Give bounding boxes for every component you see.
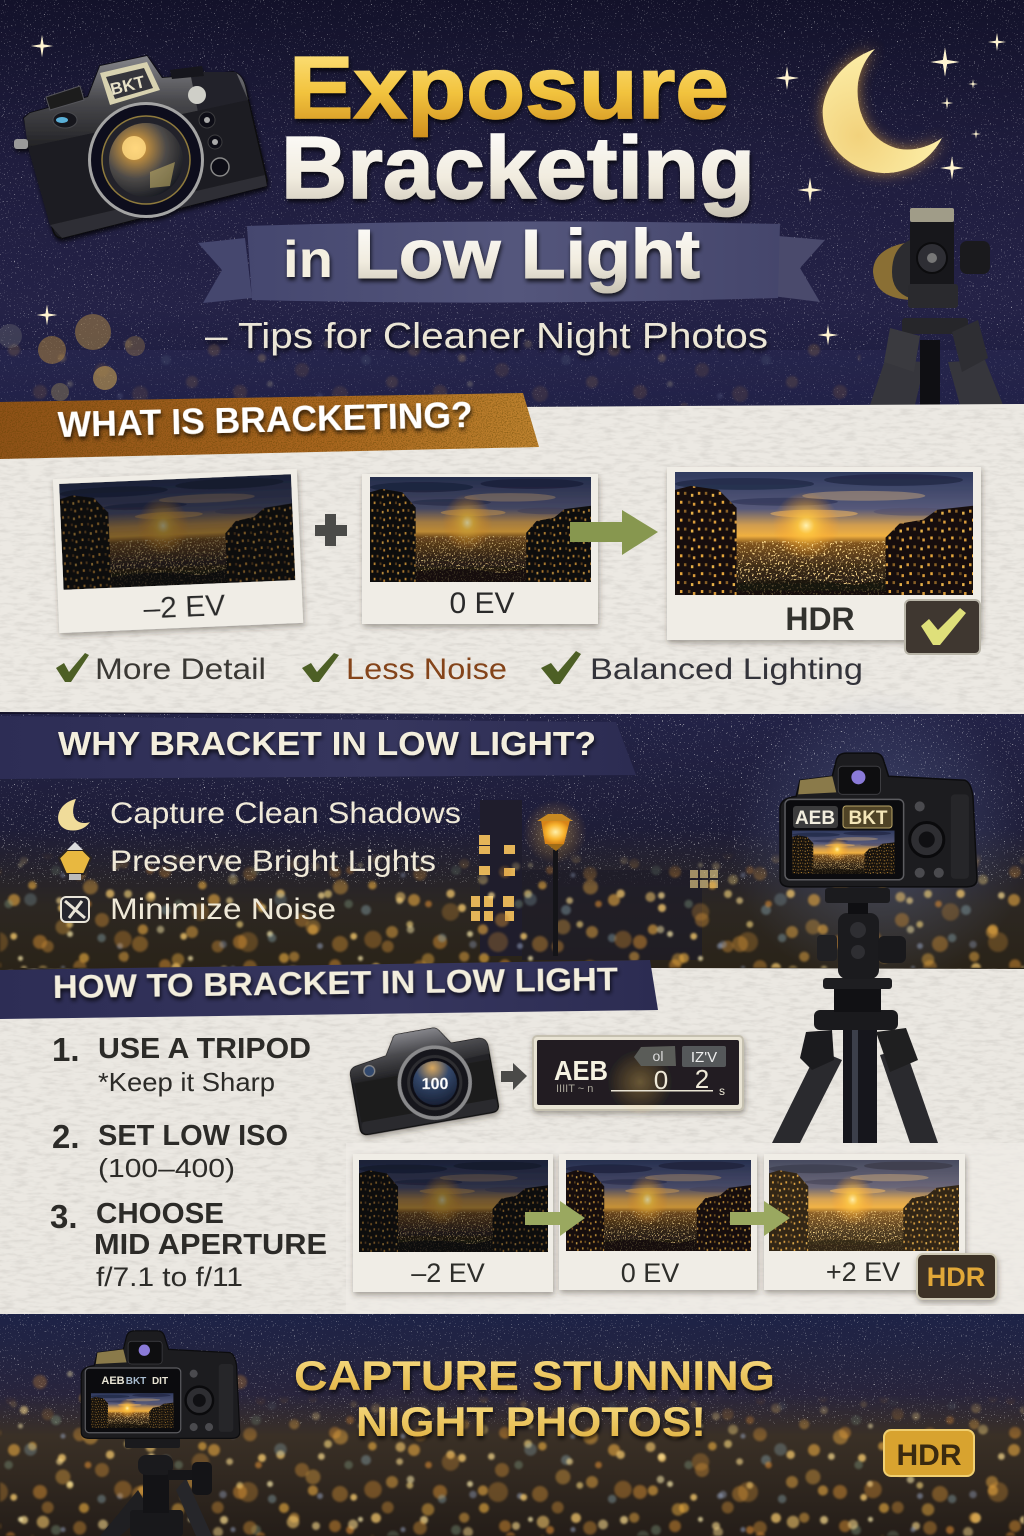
heading: how to bracket	[0, 960, 658, 1019]
step 3: choose mid aperture: f/7.1 to f/11	[96, 1262, 243, 1292]
subtitle: – Tips for Cleaner Night Photos	[205, 315, 768, 356]
step 2: set low iso: (100–400)	[98, 1153, 235, 1183]
title banner: in Low Light: Low Light	[354, 215, 700, 293]
icon: main camera with BKT plate	[14, 56, 267, 238]
icon: tripod with rear camera: AEB	[795, 808, 835, 829]
photo: lower 0 EV: 0 EV	[621, 1258, 679, 1288]
icon: HDR check badge	[905, 600, 980, 654]
icon: tripod with rear camera	[772, 753, 977, 1143]
list item: preserve bright lights	[59, 842, 436, 880]
icon: closing camera on tripod: AEB	[101, 1375, 125, 1387]
list item: minimize noise: Minimize Noise	[110, 893, 336, 926]
icon: closing camera on tripod: BKT	[126, 1376, 146, 1387]
heading: what is bracketing	[0, 390, 540, 460]
icon: sparkle stars	[31, 33, 1006, 346]
panel: why bracket night strip	[0, 712, 1024, 970]
icon: main camera with BKT plate: BKT	[108, 72, 148, 99]
arrow: 0 EV to +2 EV	[730, 1201, 790, 1236]
heading: why bracket in low light	[0, 716, 636, 779]
icon: small camera ISO 100: 100	[422, 1076, 448, 1093]
heading: why bracket in low light: WHY BRACKET IN LOW LIGHT?	[58, 725, 596, 762]
badge: closing HDR: HDR	[896, 1439, 962, 1472]
photo: -2 EV	[53, 469, 303, 633]
title banner: in Low Light: in	[283, 231, 333, 289]
photo: HDR result	[667, 467, 981, 640]
closing headline: NIGHT PHOTOS!	[356, 1398, 706, 1445]
photo: lower +2 EV: +2 EV	[826, 1257, 900, 1287]
photo: lower -2 EV	[353, 1154, 553, 1292]
photo: lower -2 EV: –2 EV	[411, 1258, 485, 1288]
icon: plus sign	[315, 514, 347, 546]
step 2: set low iso	[52, 1118, 288, 1183]
icon: closing camera on tripod	[81, 1331, 240, 1536]
heading: what is bracketing: WHAT IS BRACKETING?	[57, 394, 473, 445]
benefit: balanced lighting: Balanced Lighting	[590, 653, 863, 686]
step 2: set low iso: 2.	[52, 1118, 80, 1155]
icon: closing camera on tripod: DIT	[152, 1376, 168, 1387]
photo: HDR result: HDR	[785, 601, 855, 637]
icon: crescent moon	[823, 49, 942, 173]
title banner: in Low Light	[198, 215, 825, 303]
benefit: balanced lighting	[541, 651, 863, 686]
closing headline	[294, 1352, 775, 1445]
photo: 0 EV: 0 EV	[449, 587, 515, 620]
benefit: less noise: Less Noise	[346, 653, 507, 686]
badge: closing HDR	[884, 1430, 974, 1476]
panel: paper section how to	[0, 968, 1024, 1316]
photo: -2 EV: –2 EV	[143, 589, 226, 625]
panel: AEB display: 0	[654, 1065, 668, 1095]
badge: HDR: HDR	[927, 1262, 985, 1292]
photo: lower +2 EV	[764, 1154, 965, 1290]
panel: AEB display: s	[719, 1084, 725, 1098]
step 2: set low iso: SET LOW ISO	[98, 1120, 288, 1152]
icon: tripod with rear camera: BKT	[848, 808, 888, 829]
panel: AEB display: ol	[653, 1048, 663, 1064]
step 1: use a tripod: *Keep it Sharp	[98, 1067, 275, 1097]
icon: tripod top right	[870, 208, 1003, 406]
icon: street lamp	[523, 800, 587, 956]
step 1: use a tripod: 1.	[52, 1031, 80, 1068]
heading: how to bracket: HOW TO BRACKET IN LOW LIGHT	[53, 961, 619, 1005]
panel: closing night strip	[0, 1314, 1024, 1536]
list item: preserve bright lights: Preserve Bright Lights	[110, 845, 436, 878]
panel: AEB display: IIIIT ~ n	[556, 1083, 593, 1095]
title: Bracketing	[281, 118, 755, 217]
step 3: choose mid aperture: 3.	[50, 1198, 78, 1235]
panel: AEB display: AEB	[554, 1055, 608, 1086]
background: night sky header	[0, 0, 1024, 410]
photo: lower 0 EV	[559, 1154, 757, 1290]
arrow: camera to AEB	[501, 1063, 527, 1090]
title: Exposure	[289, 38, 729, 137]
panel: AEB display	[533, 1036, 743, 1114]
photo: 0 EV	[362, 474, 598, 624]
step 3: choose mid aperture: MID APERTURE	[94, 1229, 327, 1261]
arrow: -2 EV to 0 EV	[525, 1201, 585, 1236]
badge: HDR	[917, 1254, 996, 1299]
step 1: use a tripod	[52, 1031, 311, 1097]
list item: capture clean shadows: Capture Clean Shadows	[110, 797, 461, 830]
benefit: more detail: More Detail	[95, 653, 266, 686]
step 1: use a tripod: USE A TRIPOD	[98, 1033, 311, 1065]
title	[281, 38, 755, 217]
arrow: to HDR	[570, 510, 658, 555]
icon: small camera ISO 100	[345, 1019, 500, 1136]
step 3: choose mid aperture	[50, 1198, 327, 1292]
panel: AEB display: 2	[695, 1064, 709, 1094]
closing headline: CAPTURE STUNNING	[294, 1352, 775, 1399]
step 3: choose mid aperture: CHOOSE	[96, 1198, 224, 1230]
panel: AEB display: IZ'V	[691, 1049, 717, 1066]
panel: paper section what is bracketing	[0, 404, 1024, 716]
